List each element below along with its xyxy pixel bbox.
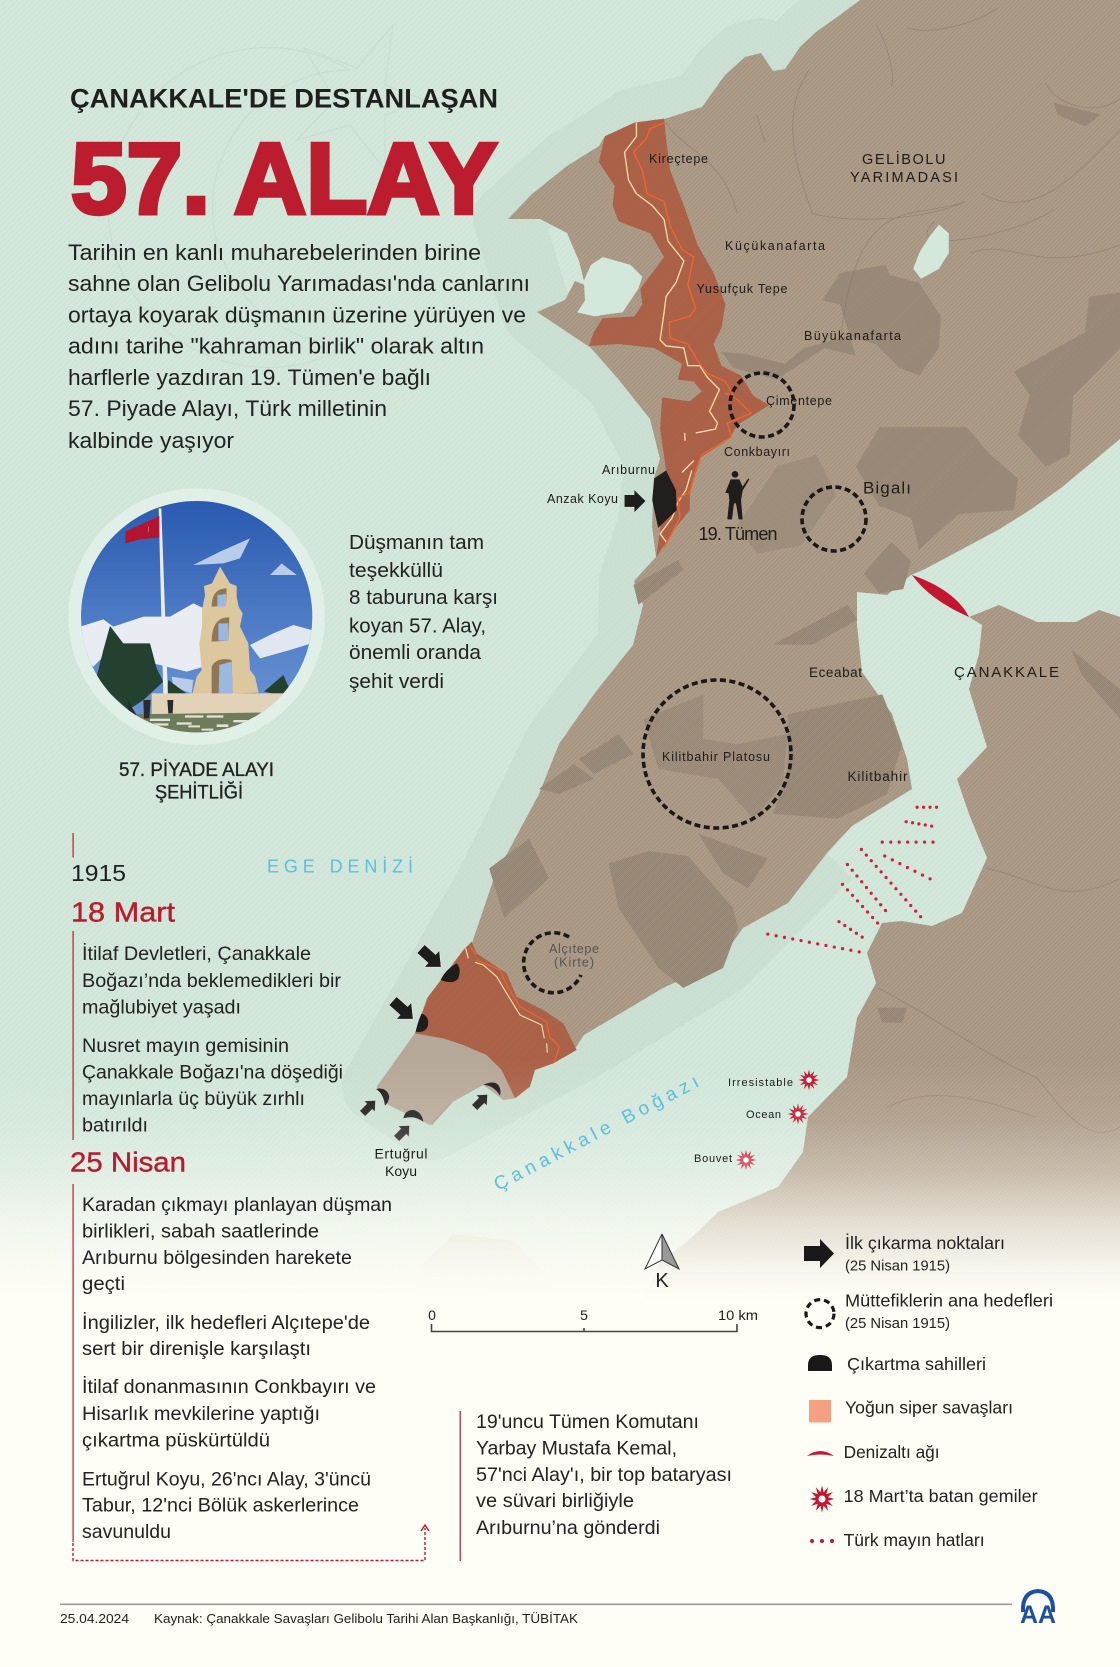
- icon: north arrow: [645, 1234, 679, 1292]
- intro paragraph: 57. Piyade Alayı, Türk milletinin: [68, 396, 387, 421]
- map labels: Bouvet: [694, 1153, 732, 1165]
- scale bar: 10 km: [718, 1307, 758, 1323]
- intro paragraph: adını tarihe "kahraman birlik" olarak altın: [68, 334, 484, 359]
- side note beside photo: Düşmanın tam: [349, 531, 484, 554]
- icon: north arrow: K: [655, 1270, 669, 1292]
- side note beside photo: önemli oranda: [349, 641, 482, 664]
- footer: [60, 1604, 1012, 1626]
- map labels: Conkbayırı: [724, 445, 790, 459]
- map: salt lake and inland water: [577, 225, 949, 316]
- legend: submarine net: Denizaltı ağı: [844, 1442, 940, 1462]
- timeline: 25 Nisan: çıkartma püskürtüldü: [82, 1430, 270, 1452]
- timeline: 25 Nisan: birlikleri, sabah saatlerinde: [82, 1220, 319, 1242]
- timeline: 18 Mart: Çanakkale Boğazı'na döşediği: [82, 1062, 343, 1084]
- icon: landing arrows south: [357, 941, 493, 1144]
- intro paragraph: sahne olan Gelibolu Yarımadası'nda canlarını: [68, 271, 530, 296]
- text block: Mustafa Kemal note: 19'uncu Tümen Komutanı: [476, 1411, 699, 1433]
- legend: landing points: (25 Nisan 1915): [845, 1258, 950, 1274]
- legend: sunken ships: [810, 1485, 1038, 1513]
- footer: Kaynak: Çanakkale Savaşları Gelibolu Tarihi Alan Başkanlığı, TÜBİTAK: [154, 1611, 578, 1626]
- photo caption: ŞEHİTLİĞİ: [155, 782, 243, 804]
- timeline: 18 Mart: Nusret mayın gemisinin: [82, 1035, 289, 1057]
- title: ÇANAKKALE'DE DESTANLAŞAN: [70, 84, 498, 114]
- map labels: Kilitbahir Platosu: [662, 750, 770, 764]
- photo caption: [119, 760, 274, 804]
- sea labels: [267, 856, 703, 1195]
- side note beside photo: 8 taburuna karşı: [349, 586, 498, 609]
- intro paragraph: kalbinde yaşıyor: [68, 428, 235, 453]
- icon: submarine net: [912, 575, 969, 617]
- timeline: 25 Nisan: Hisarlık mevkilerine yaptığı: [82, 1403, 320, 1425]
- mine lines: [768, 807, 942, 953]
- photo caption: 57. PİYADE ALAYI: [119, 760, 274, 781]
- text block: Mustafa Kemal note: 57'nci Alay'ı, bir top bataryası: [476, 1464, 732, 1486]
- legend: allied objectives: [806, 1290, 1053, 1332]
- map labels: [374, 150, 1059, 1179]
- icon: landing beaches south: [376, 963, 501, 1122]
- map labels: Irresistable: [728, 1077, 793, 1089]
- map labels: Ocean: [746, 1109, 781, 1121]
- map labels: Arıburnu: [602, 463, 655, 477]
- timeline: 25 Nisan: İtilaf donanmasının Conkbayırı ve: [82, 1375, 376, 1398]
- map labels: Alçıtepe: [549, 942, 599, 956]
- logo: AA: AA: [1020, 1601, 1056, 1629]
- timeline year: 1915: [71, 860, 126, 886]
- icon: sunken ship Irresistable: [799, 1070, 819, 1090]
- timeline rule: [72, 833, 74, 1542]
- legend: allied objectives: Müttefiklerin ana hedefleri: [845, 1290, 1053, 1310]
- text block: Mustafa Kemal note: Yarbay Mustafa Kemal,: [476, 1437, 677, 1459]
- text block: Mustafa Kemal note: ve süvari birliğiyle: [476, 1490, 634, 1512]
- icon: Anzak landing area: [625, 471, 677, 528]
- map labels: Eceabat: [809, 665, 862, 680]
- legend: mine lines: Türk mayın hatları: [844, 1530, 985, 1550]
- map labels: YARIMADASI: [850, 170, 959, 186]
- scale bar: 0: [428, 1307, 436, 1323]
- icon: sunken ship Bouvet: [736, 1150, 756, 1170]
- scale bar: 5: [580, 1307, 588, 1323]
- legend: landing points: İlk çıkarma noktaları: [845, 1233, 1005, 1253]
- map labels: GELİBOLU: [862, 150, 947, 168]
- timeline: 25 Nisan: Tabur, 12'nci Bölük askerlerince: [82, 1495, 359, 1517]
- scale bar: [428, 1307, 758, 1332]
- map labels: (Kirte): [554, 956, 594, 970]
- legend: landing points: [804, 1233, 1005, 1274]
- map labels: Kilitbahir: [848, 769, 908, 784]
- intro paragraph: ortaya koyarak düşmanın üzerine yürüyen ve: [68, 302, 526, 328]
- timeline: 18 Mart: batırıldı: [82, 1114, 148, 1136]
- timeline: 25 Nisan: Ertuğrul Koyu, 26'ncı Alay, 3'üncü: [82, 1468, 371, 1490]
- map labels: Bigalı: [863, 478, 911, 498]
- side note beside photo: [349, 531, 498, 693]
- side note beside photo: şehit verdi: [349, 670, 444, 693]
- timeline: 18 Mart: [71, 896, 343, 1136]
- icon: dashed objective circles: [524, 373, 866, 993]
- intro paragraph: harflerle yazdıran 19. Tümen'e bağlı: [68, 365, 431, 390]
- icon: sunken ship Ocean: [788, 1104, 808, 1124]
- timeline: 18 Mart: İtilaf Devletleri, Çanakkale: [82, 942, 311, 965]
- map labels: Yusufçuk Tepe: [696, 282, 788, 296]
- fade of map into the page: [0, 1060, 1120, 1320]
- map labels: Anzak Koyu: [547, 492, 618, 506]
- area: intense trench warfare north: [589, 119, 769, 558]
- side note beside photo: koyan 57. Alay,: [349, 614, 486, 638]
- intro paragraph: Tarihin en kanlı muharebelerinden birine: [68, 240, 481, 265]
- timeline: 25 Nisan: geçti: [82, 1273, 125, 1295]
- timeline: 25 Nisan: 25 Nisan: [70, 1146, 186, 1177]
- timeline: 25 Nisan: Karadan çıkmayı planlayan düşman: [82, 1194, 392, 1216]
- arrow: dashed connector to next column: [73, 1525, 429, 1560]
- map: land masses of Gallipoli and Çanakkale: [377, 0, 1120, 1310]
- title: 57. ALAY: [71, 123, 497, 235]
- map labels: Çimentepe: [766, 394, 832, 408]
- text block: Mustafa Kemal note: Arıburnu’na gönderdi: [476, 1517, 660, 1539]
- timeline: 18 Mart: 18 Mart: [71, 896, 175, 927]
- map labels: Koyu: [385, 1163, 417, 1179]
- map labels: Büyükanafarta: [804, 329, 901, 343]
- legend: trench warfare: [809, 1398, 1013, 1422]
- timeline: 18 Mart: mayınlarla üç büyük zırhlı: [82, 1088, 305, 1110]
- map labels: ÇANAKKALE: [954, 664, 1059, 681]
- icon: soldier: [725, 471, 749, 519]
- map labels: Küçükanafarta: [725, 239, 825, 253]
- legend: [804, 1233, 1053, 1550]
- legend: landing beaches: Çıkartma sahilleri: [847, 1354, 986, 1374]
- sea labels: Çanakkale Boğazı: [491, 1072, 703, 1195]
- legend: allied objectives: (25 Nisan 1915): [845, 1316, 950, 1332]
- photo: 57th regiment memorial: [68, 488, 327, 745]
- map labels: Ertuğrul: [374, 1146, 428, 1162]
- map: lower fields near tip: [377, 1033, 515, 1125]
- map labels: 19. Tümen: [698, 524, 778, 544]
- sea labels: EGE DENİZİ: [267, 856, 413, 876]
- side note beside photo: teşekküllü: [349, 559, 443, 582]
- text block: Mustafa Kemal note: [460, 1411, 732, 1561]
- intro paragraph: [68, 240, 530, 453]
- footer: 25.04.2024: [60, 1611, 129, 1626]
- legend: trench warfare: Yoğun siper savaşları: [845, 1398, 1013, 1418]
- timeline: 25 Nisan: [70, 1146, 392, 1543]
- timeline: 18 Mart: mağlubiyet yaşadı: [82, 997, 241, 1019]
- timeline: 25 Nisan: Arıburnu bölgesinden harekete: [82, 1247, 352, 1269]
- map labels: Kireçtepe: [649, 152, 708, 166]
- timeline: 25 Nisan: sert bir direnişle karşılaştı: [82, 1338, 311, 1360]
- legend: sunken ships: 18 Mart’ta batan gemiler: [844, 1486, 1038, 1506]
- timeline: 25 Nisan: savunuldu: [82, 1521, 171, 1543]
- timeline: 25 Nisan: İngilizler, ilk hedefleri Alçıtepe'de: [82, 1311, 370, 1334]
- timeline: 18 Mart: Boğazı’nda beklemedikleri bir: [82, 970, 342, 992]
- area: intense trench warfare south: [415, 942, 577, 1098]
